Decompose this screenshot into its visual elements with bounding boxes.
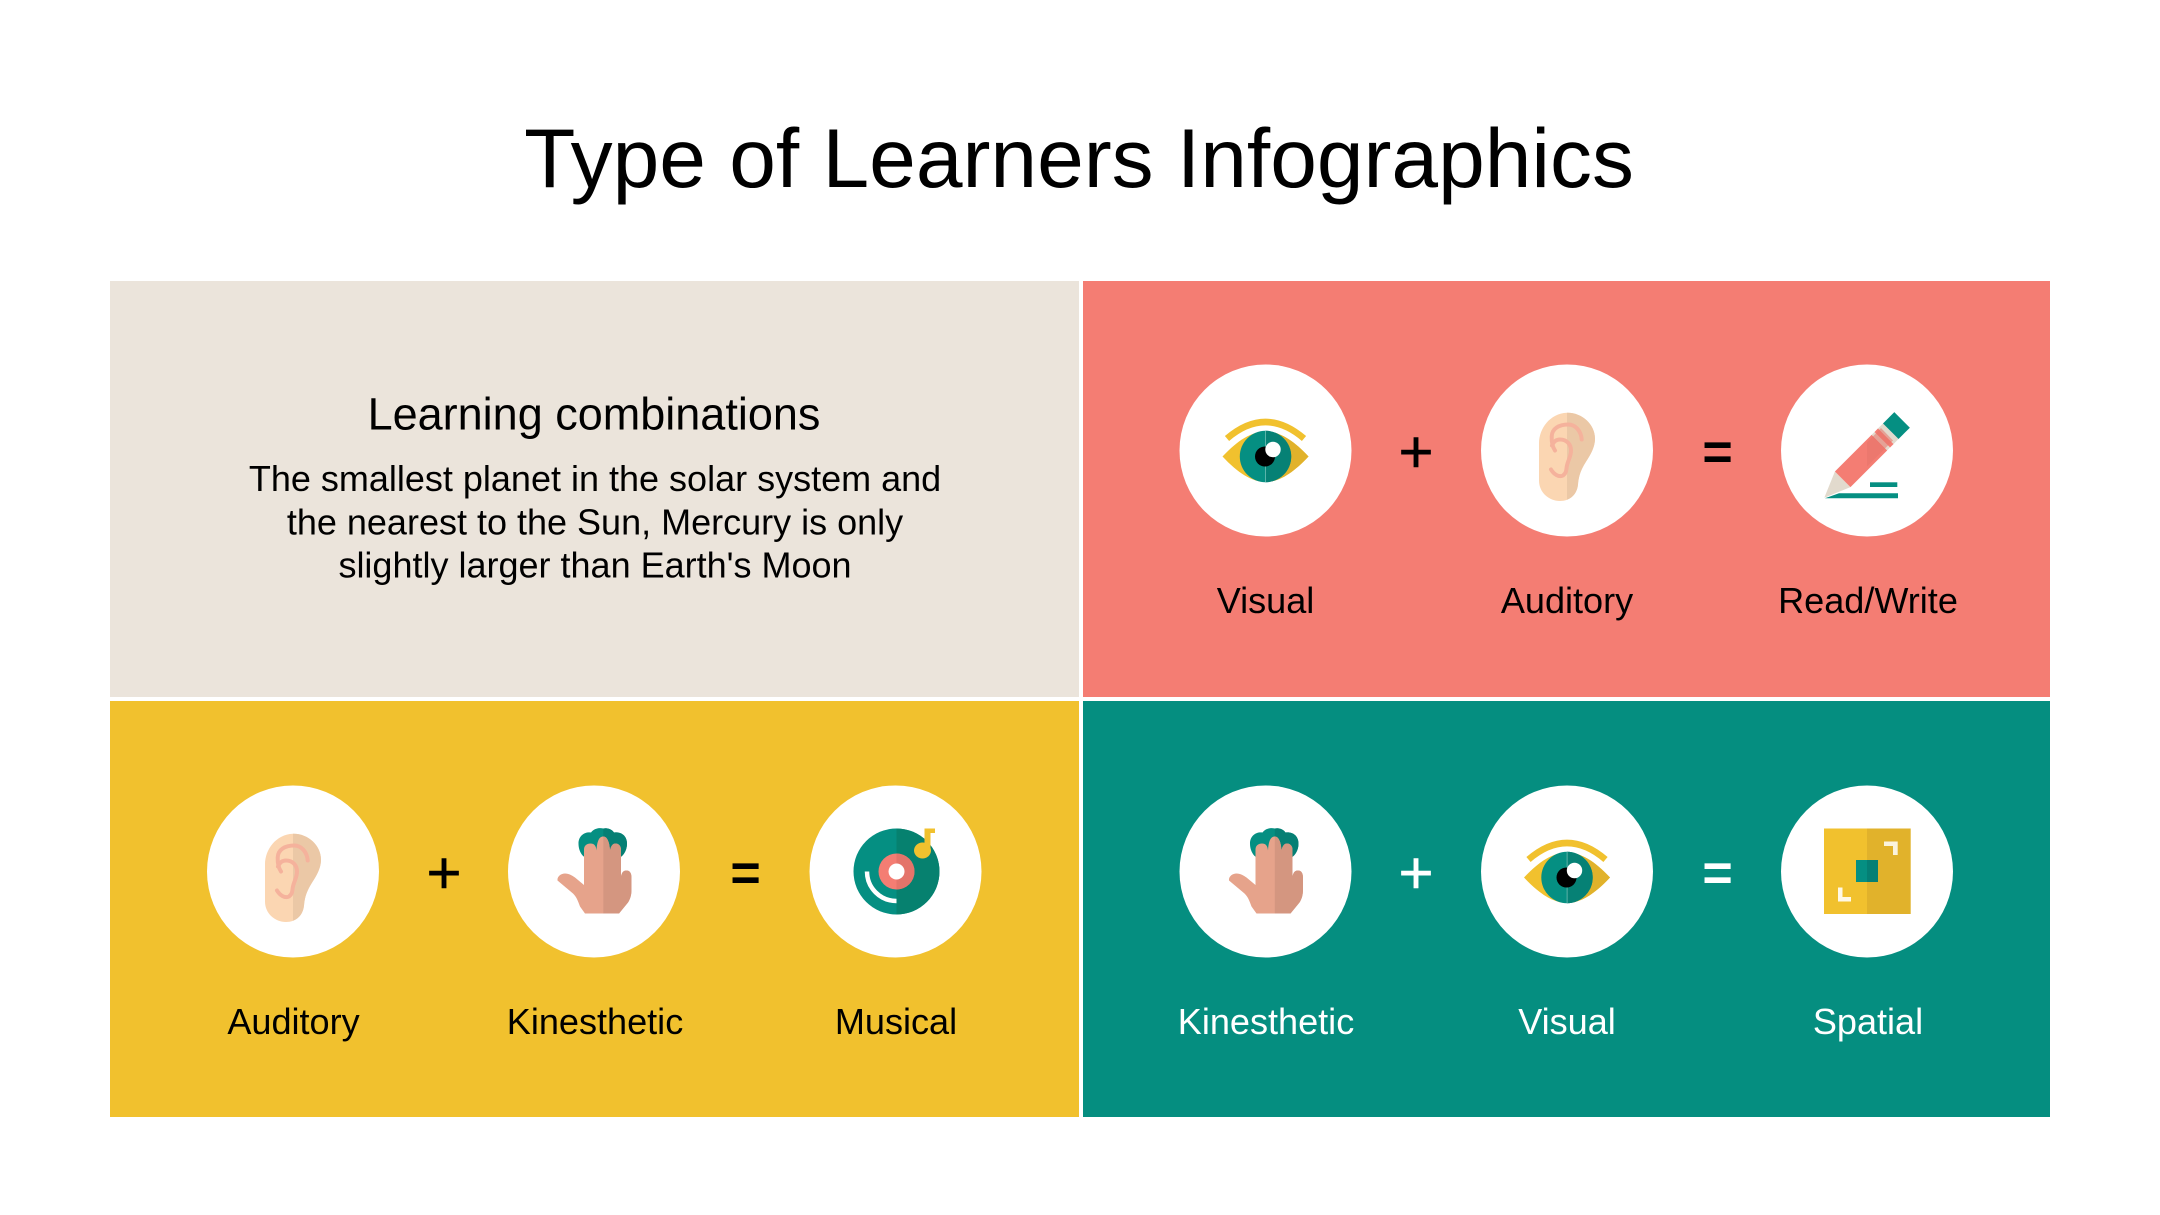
icon: visual eye bbox=[1481, 786, 1653, 958]
label: kinesthetic: Kinesthetic bbox=[1178, 1001, 1354, 1042]
equals sign: = bbox=[730, 844, 761, 902]
panel: learning combinations bbox=[110, 281, 1079, 697]
title: Type of Learners Infographics bbox=[524, 111, 1634, 205]
label: visual: Visual bbox=[1217, 580, 1314, 621]
icon: read/write pencil bbox=[1781, 364, 1953, 536]
equals sign: = bbox=[1702, 844, 1733, 902]
label: musical: Musical bbox=[835, 1001, 957, 1042]
label: auditory: Auditory bbox=[227, 1001, 360, 1042]
description text: the nearest to the Sun, Mercury is only bbox=[287, 502, 903, 542]
label: kinesthetic: Kinesthetic bbox=[507, 1001, 683, 1042]
plus sign: + bbox=[1398, 418, 1434, 486]
label: read/write: Read/Write bbox=[1778, 580, 1958, 621]
label: spatial: Spatial bbox=[1813, 1001, 1923, 1042]
description text: slightly larger than Earth's Moon bbox=[338, 544, 852, 586]
icon: spatial square bbox=[1781, 786, 1953, 958]
equals sign: = bbox=[1702, 424, 1733, 482]
plus sign: + bbox=[426, 840, 462, 906]
label: visual: Visual bbox=[1518, 1001, 1616, 1042]
icon: auditory ear bbox=[207, 786, 379, 958]
heading: learning combinations: Learning combinations bbox=[368, 388, 820, 440]
description text: The smallest planet in the solar system and bbox=[249, 458, 941, 499]
panel: musical combination bbox=[110, 701, 1079, 1117]
panel: spatial combination bbox=[1083, 701, 2050, 1117]
label: auditory: Auditory bbox=[1501, 580, 1633, 621]
icon: auditory ear bbox=[1481, 364, 1653, 536]
icon: musical record bbox=[810, 786, 982, 958]
icon: kinesthetic hand bbox=[508, 786, 680, 958]
plus sign: + bbox=[1398, 840, 1434, 906]
icon: visual eye bbox=[1180, 364, 1352, 536]
icon: kinesthetic hand bbox=[1180, 786, 1352, 958]
panel: read/write combination bbox=[1083, 281, 2050, 697]
